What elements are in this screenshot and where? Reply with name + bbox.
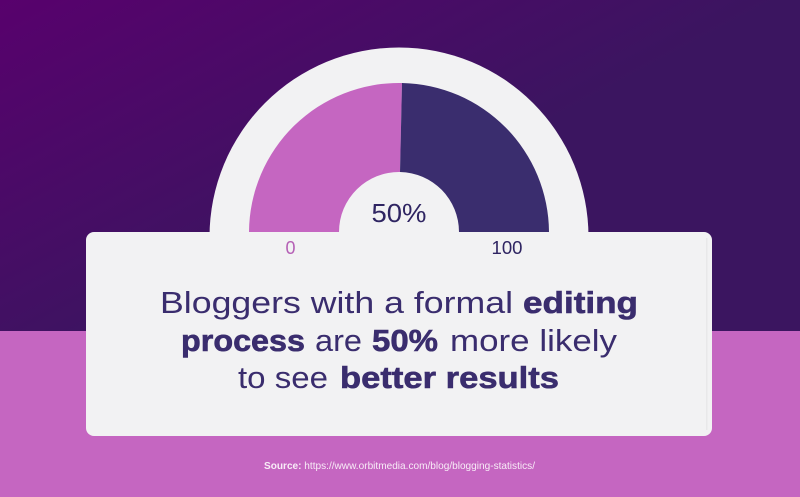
headline line 2: more likely [450, 323, 618, 358]
headline line 3: to see [238, 360, 328, 395]
background: pink lower band [0, 331, 800, 497]
gauge label: 0: 0 [285, 238, 296, 258]
gauge value: 50% [372, 198, 426, 228]
headline line 3 [238, 360, 559, 395]
gauge segment: pink half [249, 83, 402, 232]
headline line 3: better results [340, 360, 559, 395]
headline line 2: process [181, 323, 305, 358]
background: dark purple upper band [0, 0, 800, 331]
source line: Source: https://www.orbitmedia.com/blog/blogging-statistics/ [264, 460, 535, 472]
gauge segment: navy half [400, 83, 549, 232]
headline line 2 [181, 323, 618, 358]
headline line 1: editing [523, 285, 638, 320]
main white card [86, 232, 712, 436]
gauge [210, 48, 588, 237]
headline line 1: Bloggers with a formal [160, 285, 513, 320]
gauge outer white arch [210, 48, 588, 237]
headline line 2: 50% [372, 323, 438, 358]
headline line 1 [160, 285, 638, 320]
headline line 2: are [315, 323, 362, 358]
gauge label: 100: 100 [492, 238, 522, 258]
headline text [160, 285, 638, 395]
